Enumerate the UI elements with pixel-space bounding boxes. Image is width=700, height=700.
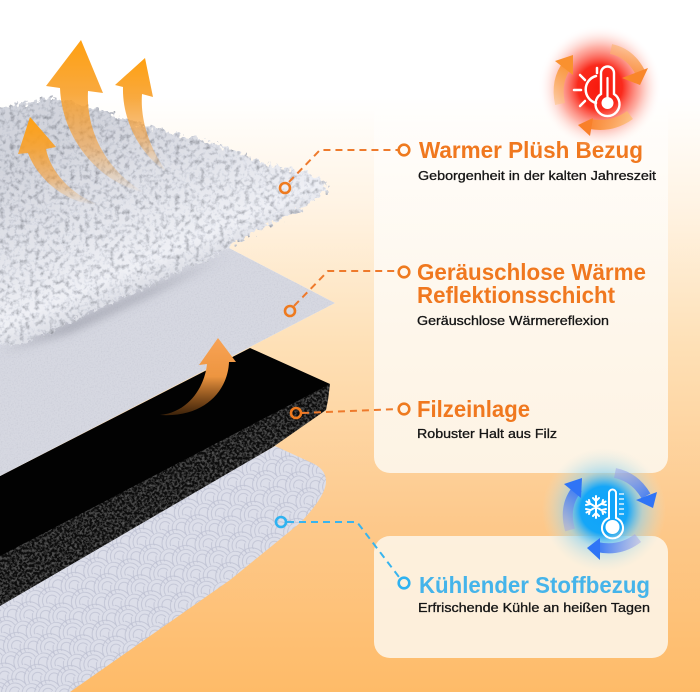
heading: reflective layer: Geräuschlose Wärme: [417, 259, 646, 285]
layer: plush cover: [0, 98, 328, 345]
arrow: heat rising centre: [46, 40, 145, 193]
arrow: heat rising right: [115, 58, 167, 172]
panel: bottom text card: [374, 536, 668, 658]
layer: felt insert: [0, 348, 330, 606]
connector: felt: [291, 404, 409, 418]
text: felt description: Robuster Halt aus Filz: [417, 427, 557, 441]
icon: cooling cycle: [542, 448, 666, 572]
shadow: under plush: [0, 256, 225, 352]
heading: cooling fabric: Kühlender Stoffbezug: [419, 572, 650, 598]
panel: top text card: [374, 100, 668, 473]
icon: heat cycle: [538, 25, 662, 149]
connector: reflective layer: [285, 267, 409, 316]
felt top face: [0, 348, 330, 556]
layer: cooling fabric: [0, 446, 326, 692]
felt side face: [0, 384, 330, 606]
layer: grey reflective sheet: [0, 247, 335, 476]
text: plush description: Geborgenheit in der kalten Jahreszeit: [418, 169, 657, 183]
text: cooling description: Erfrischende Kühle an heißen Tagen: [418, 601, 650, 615]
connector: plush cover: [280, 145, 409, 193]
text: reflective description: Geräuschlose Wärmereflexion: [417, 314, 609, 328]
arrow: heat rising left: [18, 117, 100, 205]
heading: felt: Filzeinlage: [417, 396, 530, 422]
heading: plush: Warmer Plüsh Bezug: [419, 137, 643, 163]
heading: reflective layer: Reflektionsschicht: [417, 282, 615, 308]
arrow: heat reflected: [160, 338, 236, 415]
connector: cooling fabric: [276, 517, 409, 588]
